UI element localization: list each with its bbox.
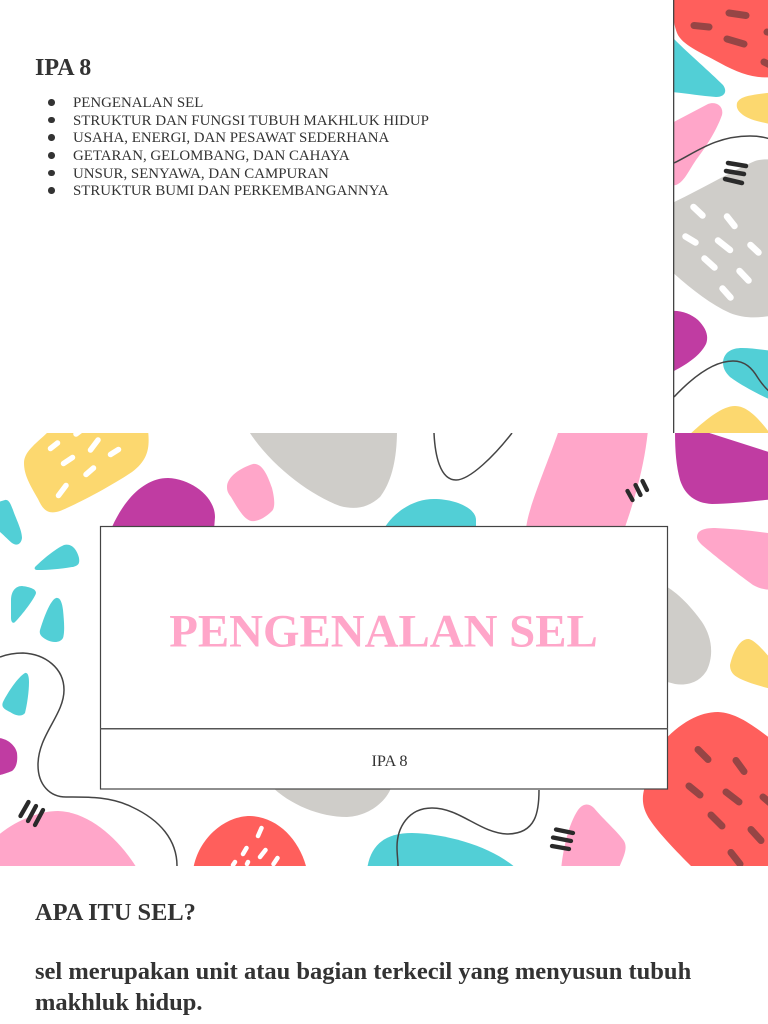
text block: definition [35,958,691,1016]
shape: big pink mound [0,811,138,870]
shape: purple blob [110,478,215,530]
shape: small pink blob [227,464,274,521]
heading: IPA 8: IPA 8 [35,55,91,81]
line: upper curve [674,136,768,163]
shape: cyan mound [386,499,476,526]
title card divider [100,728,668,730]
shape: yellow blob right [730,639,768,690]
shape: pink blob [670,103,722,186]
heading: pengenalan sel: PENGENALAN SEL [169,606,598,658]
panel: top-right decorative strip [670,0,768,436]
list: topics: UNSUR, SENYAWA, DAN CAMPURAN [73,166,329,182]
list: topics: USAHA, ENERGI, DAN PESAWAT SEDERHANA [73,130,389,146]
shape: pink blob bottom [561,804,626,870]
list: topics [48,95,429,199]
list: topics: STRUKTUR DAN FUNGSI TUBUH MAKHLUK HIDUP [73,113,429,129]
shape: grey blob [248,430,397,508]
shape: purple blob left [0,738,17,776]
shape: grey blob right [668,588,712,684]
shape: pink blob right [697,528,768,590]
list: topics: GETARAN, GELOMBANG, DAN CAHAYA [73,148,350,164]
line: long left curve [0,653,177,866]
shape: purple blob right [675,430,768,504]
line: bottom curve [397,790,539,866]
shape: cyan blob left d [40,598,64,642]
shape: red blob with dashes [643,712,768,870]
heading: apa itu sel: APA ITU SEL? [35,899,196,926]
icon: black dashes [628,481,647,500]
icon: black dashes [20,802,43,825]
shape: cyan blob left b [35,545,79,570]
text block: definition: sel merupakan unit atau bagian terkecil yang menyusun tubuh [35,958,691,985]
line: lower curve [674,361,768,397]
line: top curve [434,433,512,480]
shape: red mound with white dashes [193,816,307,870]
icon: black dashes [725,163,746,183]
list: topics: PENGENALAN SEL [73,95,203,111]
shape: cyan blob [723,348,768,402]
shape: tall pink blob [526,430,648,530]
shape: purple blob [674,310,708,371]
list: topics: STRUKTUR BUMI DAN PERKEMBANGANNYA [73,183,389,199]
subtitle: IPA 8: IPA 8 [371,751,408,770]
divider: vertical slide edge [673,0,674,433]
icon: black dashes [552,830,573,849]
shape: yellow blob [737,92,768,125]
shape: grey blob with white dashes [670,159,768,317]
shape: cyan triangle [674,39,726,97]
shape: yellow blob with white dashes [24,430,149,512]
text block: definition: makhluk hidup. [35,989,203,1016]
shape: cyan mound bottom [368,833,514,866]
title card upper box [100,526,668,789]
shape: red blob with dashes [670,0,768,77]
shape: grey blob under card [275,790,390,817]
shape: cyan blob left c [11,586,36,623]
shape: yellow mound [691,406,768,433]
shape: cyan blob left a [0,500,22,545]
panel: title slide background shapes [0,430,768,870]
panel: title card [100,526,668,789]
shape: cyan blob left e [2,673,29,716]
